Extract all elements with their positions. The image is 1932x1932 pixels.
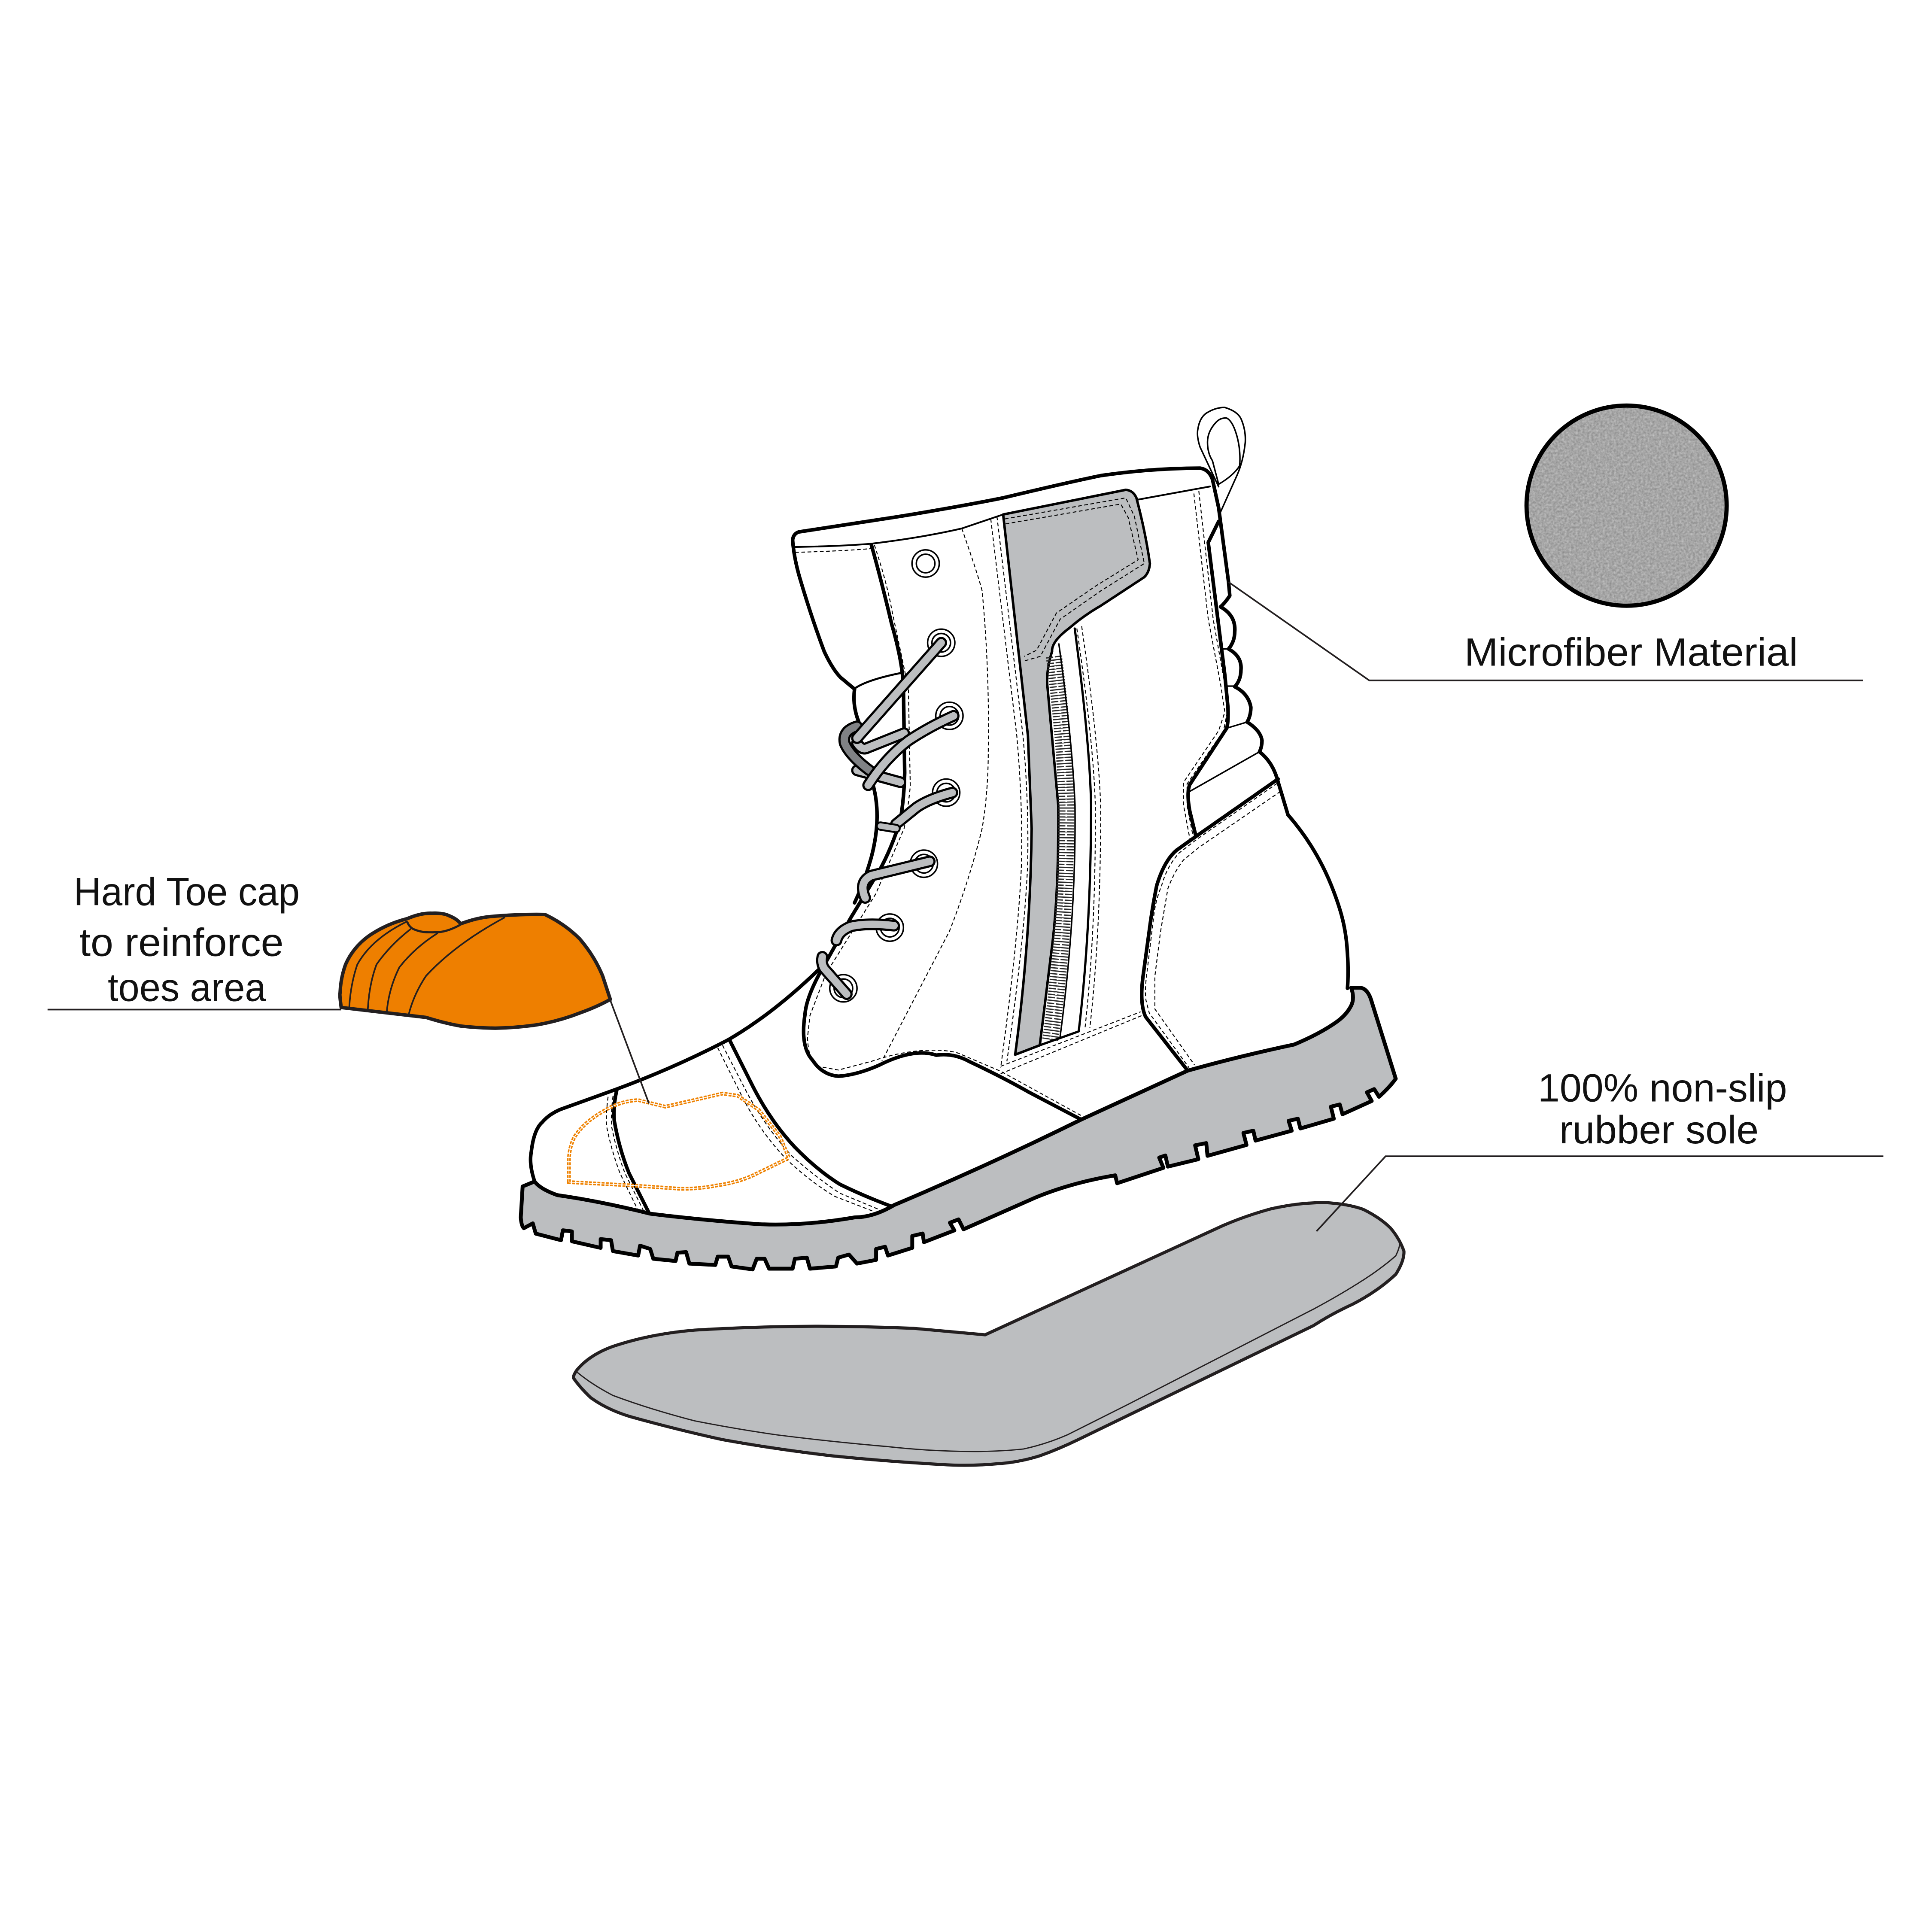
leader lines: toe cap (48, 1000, 649, 1103)
leader line: microfiber (1229, 582, 1863, 680)
toe reinforcement outline (569, 1094, 789, 1189)
label: hard toe cap: Hard Toe cap (74, 869, 300, 914)
leader line: rubber sole (1316, 1156, 1883, 1231)
swatch border (1527, 406, 1727, 606)
boot upper outline (531, 468, 1348, 1182)
collar inner line (793, 486, 1210, 547)
boot (521, 407, 1396, 1270)
eyelets (830, 550, 963, 1002)
hard toe cap (340, 913, 611, 1028)
reflective panel stitching (1005, 498, 1144, 661)
microfiber swatch (1527, 406, 1727, 606)
label: rubber sole (1538, 1066, 1787, 1152)
label: microfiber: Microfiber Material (1464, 629, 1798, 674)
reflective panel (1003, 490, 1150, 1055)
label: hard toe cap: to reinforce (79, 920, 284, 965)
callout: hard toe cap (48, 869, 649, 1103)
toe cap and vamp seams (614, 1040, 891, 1213)
label: rubber sole: 100% non-slip (1538, 1066, 1787, 1110)
callout: rubber sole (1316, 1066, 1883, 1231)
insole (574, 1203, 1404, 1465)
stitching (606, 491, 1281, 1211)
callout: microfiber material (1229, 406, 1863, 680)
laces (822, 643, 954, 994)
heel counter (1142, 521, 1278, 1071)
pull loop (1197, 407, 1245, 512)
label: hard toe cap: toes area (108, 965, 266, 1010)
rubber outsole (521, 987, 1396, 1270)
zipper (1040, 629, 1091, 1045)
label: hard toe cap (74, 869, 300, 1010)
label: rubber sole: rubber sole (1559, 1107, 1759, 1152)
